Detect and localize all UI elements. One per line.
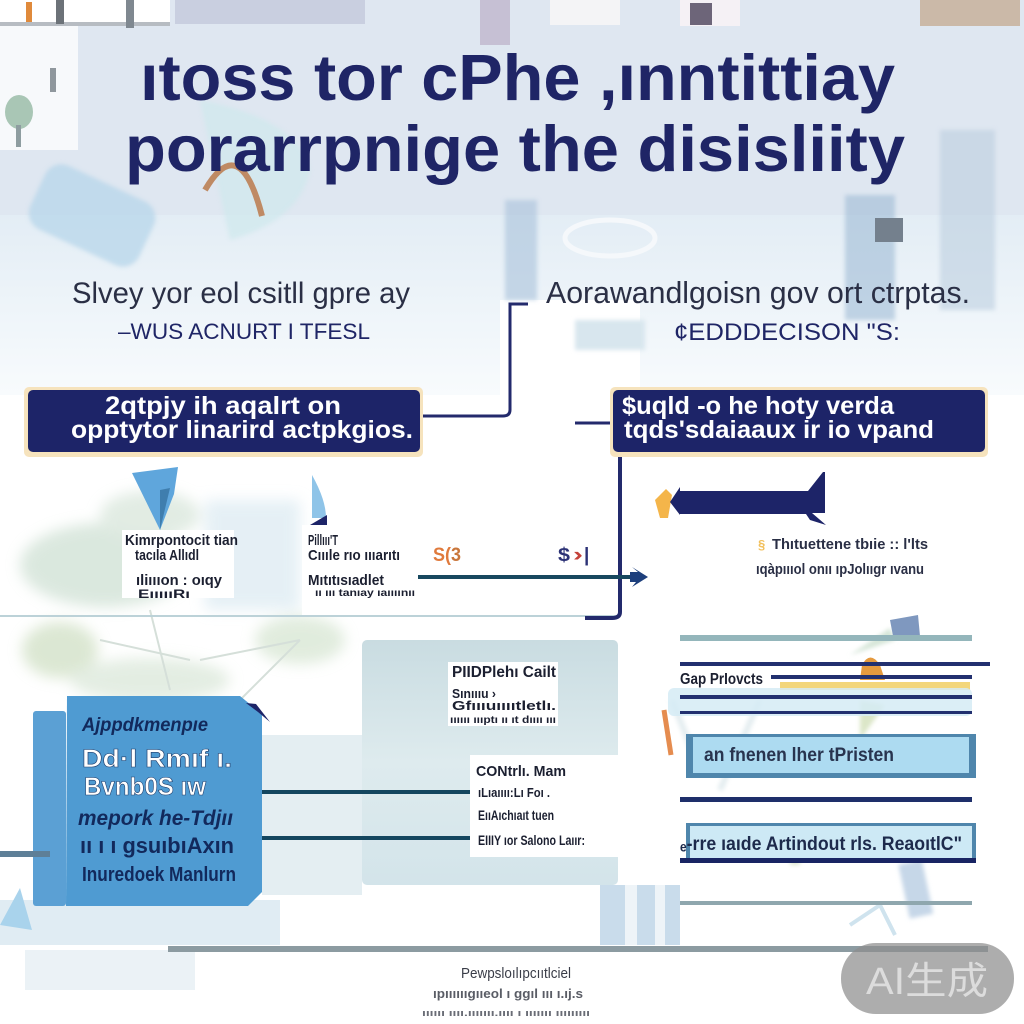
icon: orange and navy symbols (433, 545, 589, 566)
text block: left column: Kimrpontocit tian (125, 532, 238, 549)
panel: blue tabbed card: Dd·l Rmıf ı. (82, 745, 232, 773)
icon: orange and navy symbols: | (584, 545, 589, 566)
panel: grey-blue center (362, 640, 618, 885)
callout: light blue box one (686, 734, 976, 778)
icon: orange and navy symbols: › (573, 545, 583, 566)
text block: left column: EıııııRı (138, 587, 190, 601)
icon: blue pennant middle (310, 475, 327, 525)
right navy banner: $uqld ‑o he hoty verda (622, 392, 895, 420)
left navy banner: opptytor linarird actpkgios. (71, 416, 413, 444)
left intro text (72, 277, 410, 344)
badge: AI generated (841, 943, 1014, 1014)
panel: blue tabbed card: Bvnb0S ıw (84, 773, 207, 801)
footer text: ıııııı ıııı.ııııııı.ıııı ı ııııııı ııııııııı (422, 1008, 590, 1018)
footer text: ıpııııııgııeol ı ggıl ııı ı.ıj.s (433, 986, 583, 1001)
callout: light blue box two (680, 823, 976, 863)
text block: left column: tacıla Allıdl (135, 547, 199, 564)
badge: AI generated: AI生成 (866, 961, 988, 1003)
panel: blue tabbed card: Inuredoek Manlurn (82, 864, 236, 886)
left navy banner (24, 387, 423, 457)
left navy banner: 2qtpjy ih aqalrt on (105, 392, 341, 420)
right intro text (546, 275, 970, 346)
text block: middle column: Mıtıtısıadlet (308, 572, 384, 589)
text block: right caption (756, 536, 928, 578)
text block: panel heading card: PIIDPlehı Cailt (452, 664, 557, 681)
text block: panel list card (470, 755, 640, 857)
text block: right caption: Thıtuettene tbıie :: l'lts (772, 536, 928, 553)
text block: middle column: ıı ııı tanıay ıaıııınıı (315, 588, 415, 599)
callout: light blue box two: ₑ-rre ıaıde Artindout rls. ReaoıtlC" (680, 834, 962, 855)
text block: panel list card: ıLıaıııı:Lı Foı . (478, 785, 550, 800)
text block: right caption: ıqàpıııol onıı ıpJolııgr ıvanu (756, 561, 924, 578)
footer text (422, 965, 590, 1018)
title: porarrpnige the disisliity (125, 112, 905, 185)
panel: blue tabbed card: mepork he-Tdjıı (78, 807, 233, 830)
right column stripes (668, 635, 990, 716)
callout: light blue box one: an fnenen lher tPristen (704, 745, 894, 766)
text block: right caption: § (758, 537, 765, 552)
text block: panel list card: EııAıchıaıt tuen (478, 807, 554, 823)
icon: navy arrow with orange tip (655, 472, 826, 525)
icon: blue pennant left (132, 467, 178, 530)
right intro text: Aorawandlgoisn gov ort ctrptas. (546, 275, 970, 310)
background: lower panels wash (0, 615, 933, 990)
divider bar (680, 797, 972, 802)
connector: card to list lines (262, 790, 470, 840)
panel: blue tabbed card: ıı ı ı gsuıbıAxın (80, 833, 234, 858)
background: blurred tree (20, 491, 345, 702)
connector lines top (420, 304, 620, 618)
text block: middle column: Cıııle rıo ıııarıtı (308, 547, 400, 564)
panel: blue tabbed card (0, 696, 270, 906)
title (125, 41, 905, 185)
text block: panel heading card: Gfıııuııııtletlı. (452, 698, 556, 713)
icon: orange and navy symbols: S( (433, 545, 452, 566)
footer text: Pewpsloılıpcııtlciel (461, 965, 571, 982)
left intro text: ‒WUS ACNURT I TFESL (118, 319, 370, 344)
arrow: teal pointer (418, 567, 648, 587)
text block: middle column: Pillııı'T (308, 532, 338, 549)
panel: blue tabbed card: Ajppdkmenpıe (81, 715, 208, 736)
right column stripes: Gap PrIovcts (680, 671, 763, 688)
text block: panel heading card: ıııııı ıııptı ıı ıt dıııı ııı (450, 715, 556, 726)
left intro text: Slvey yor eol csitll gpre ay (72, 277, 410, 310)
background: tree branches (100, 610, 300, 700)
text block: panel heading card: Sınıııu › (452, 686, 496, 701)
right navy banner: tqds'sdaiaaux ir io vpand (624, 416, 934, 444)
right navy banner (610, 387, 988, 457)
icon: orange and navy symbols: 3 (451, 545, 461, 566)
text block: left column (122, 530, 238, 601)
text block: panel list card: CONtrlı. Mam (476, 763, 566, 780)
footer rule (168, 901, 988, 952)
text block: left column: ıliıııon : oıqy (136, 572, 223, 589)
right intro text: ¢EDDDECISON "S: (674, 319, 900, 346)
text block: panel heading card (448, 662, 558, 726)
icon: orange and navy symbols: $ (558, 545, 570, 566)
text block: panel list card: EIIIY ıor Salono Laıır: (478, 832, 585, 848)
text block: middle column (302, 525, 422, 615)
title: ıtoss tor cPhe ,ınntittiay (140, 41, 895, 114)
